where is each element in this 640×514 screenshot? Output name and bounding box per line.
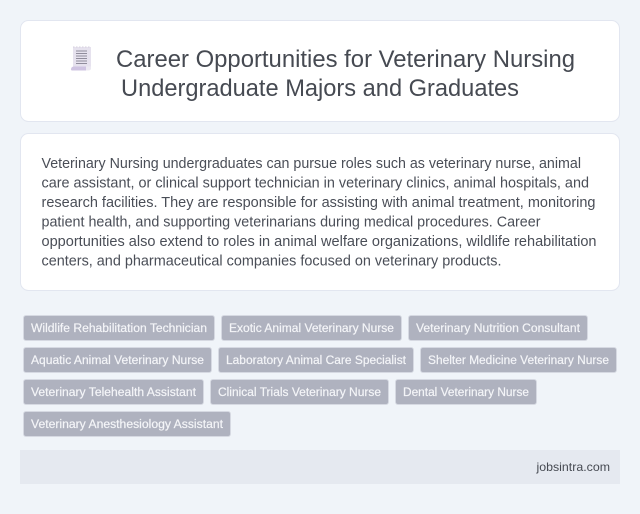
icon: document scroll	[71, 47, 91, 70]
tag: Veterinary Nutrition Consultant	[408, 316, 588, 340]
tag: Veterinary Anesthesiology Assistant	[24, 412, 230, 436]
tag: Veterinary Nutrition Consultant: Veterinary Nutrition Consultant	[416, 321, 581, 335]
tag: Aquatic Animal Veterinary Nurse: Aquatic Animal Veterinary Nurse	[31, 353, 204, 367]
text block: description: opportunities also extend to roles in animal welfare organizations, wildlife rehabilitation	[42, 234, 596, 250]
text block: description: care assistant, or clinical support technician in veterinary clinics, animal hospitals, and	[42, 176, 589, 192]
tag: Laboratory Animal Care Specialist	[218, 348, 414, 372]
text block: description	[42, 156, 596, 270]
panel: description	[20, 134, 620, 290]
title: Undergraduate Majors and Graduates	[121, 75, 519, 102]
tag: Veterinary Telehealth Assistant: Veterinary Telehealth Assistant	[31, 385, 197, 399]
title: Career Opportunities for Veterinary Nursing	[116, 46, 575, 73]
title	[116, 46, 575, 102]
tag: Wildlife Rehabilitation Technician: Wildlife Rehabilitation Technician	[31, 321, 207, 335]
tag: Clinical Trials Veterinary Nurse	[210, 380, 388, 404]
tag list: career roles	[24, 316, 616, 436]
tag: Veterinary Anesthesiology Assistant: Veterinary Anesthesiology Assistant	[31, 417, 224, 431]
tag: Laboratory Animal Care Specialist: Laboratory Animal Care Specialist	[226, 353, 407, 367]
footer text: source: jobsintra.com	[535, 460, 610, 474]
text block: description: patient health, and supporting veterinarians during medical procedures. Career	[42, 214, 541, 230]
tag: Aquatic Animal Veterinary Nurse	[24, 348, 212, 372]
panel: header	[20, 20, 620, 122]
tag: Dental Veterinary Nurse	[396, 380, 536, 404]
tag: Shelter Medicine Veterinary Nurse	[420, 348, 616, 372]
text block: description: research facilities. They are responsible for assisting with animal treatment, monitoring	[42, 195, 596, 211]
tag: Wildlife Rehabilitation Technician	[24, 316, 214, 340]
footer	[20, 450, 620, 484]
tag: Clinical Trials Veterinary Nurse: Clinical Trials Veterinary Nurse	[218, 385, 381, 399]
text block: description: Veterinary Nursing undergraduates can pursue roles such as veterinary nurse, animal	[42, 156, 581, 172]
tag: Shelter Medicine Veterinary Nurse: Shelter Medicine Veterinary Nurse	[428, 353, 609, 367]
text block: description: centers, and pharmaceutical companies focused on veterinary products.	[42, 254, 502, 270]
tag: Veterinary Telehealth Assistant	[24, 380, 204, 404]
tag: Exotic Animal Veterinary Nurse: Exotic Animal Veterinary Nurse	[229, 321, 394, 335]
tag: Exotic Animal Veterinary Nurse	[222, 316, 402, 340]
tag: Dental Veterinary Nurse: Dental Veterinary Nurse	[403, 385, 529, 399]
